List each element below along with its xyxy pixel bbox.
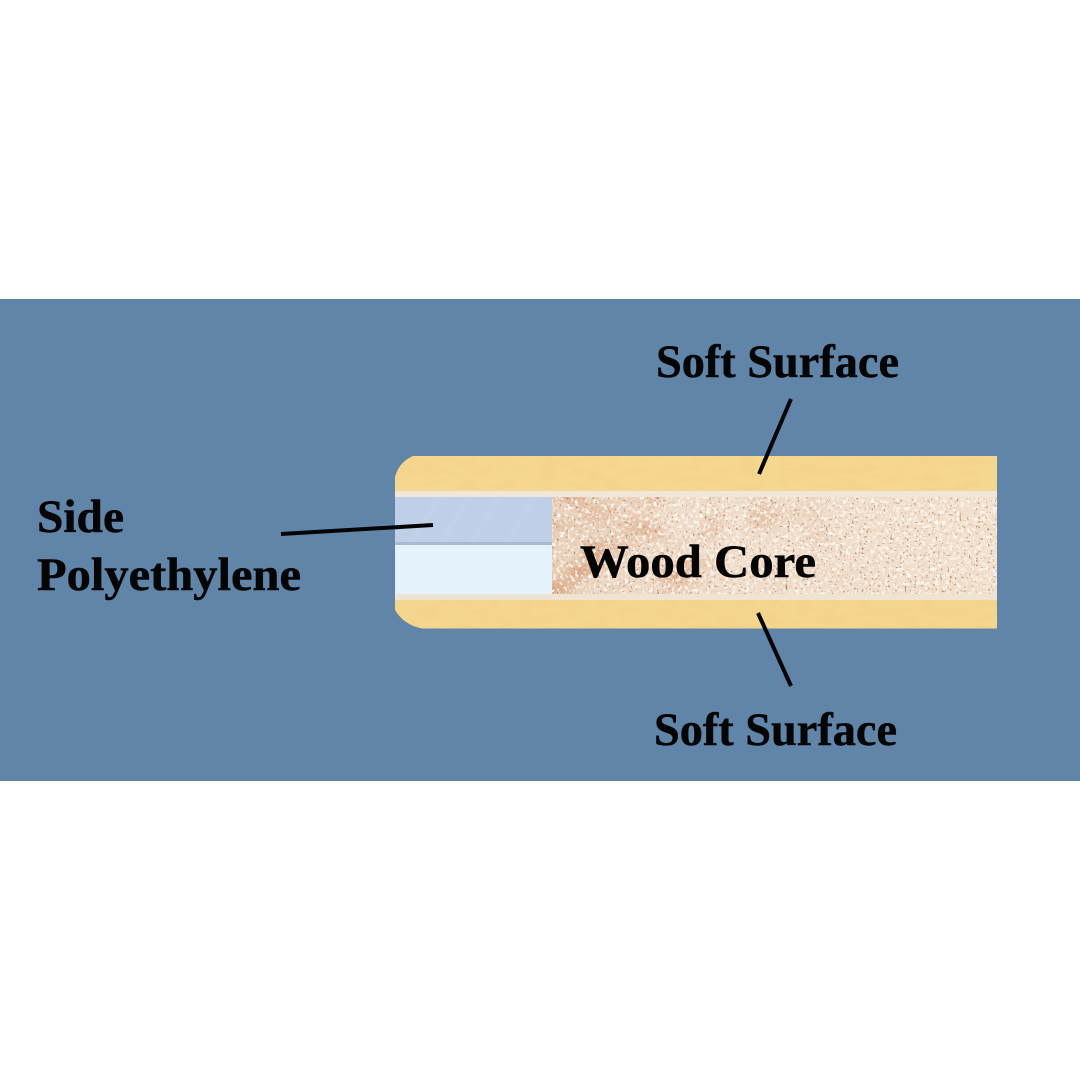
wood core — [552, 497, 997, 594]
board cross-section — [395, 456, 997, 629]
label: bottom soft surface: Soft Surface — [654, 704, 897, 756]
bottom light strip — [395, 594, 997, 600]
leader line: top soft surface — [759, 399, 791, 474]
top light strip — [395, 491, 997, 497]
top soft surface layer — [395, 456, 997, 492]
polyethylene divider — [395, 542, 552, 545]
label: side polyethylene — [37, 491, 301, 601]
bottom soft surface layer — [395, 600, 997, 629]
leader line: bottom soft surface — [758, 613, 791, 686]
label: side polyethylene: Side — [37, 491, 124, 543]
infographic canvas — [0, 299, 1080, 781]
blue panel — [0, 299, 1080, 781]
label: top soft surface: Soft Surface — [656, 336, 899, 388]
side polyethylene lower band — [395, 544, 552, 594]
side polyethylene upper band — [395, 497, 552, 544]
leader line: side polyethylene — [281, 525, 433, 534]
label: side polyethylene: Polyethylene — [37, 549, 301, 601]
label: wood core: Wood Core — [580, 536, 816, 588]
